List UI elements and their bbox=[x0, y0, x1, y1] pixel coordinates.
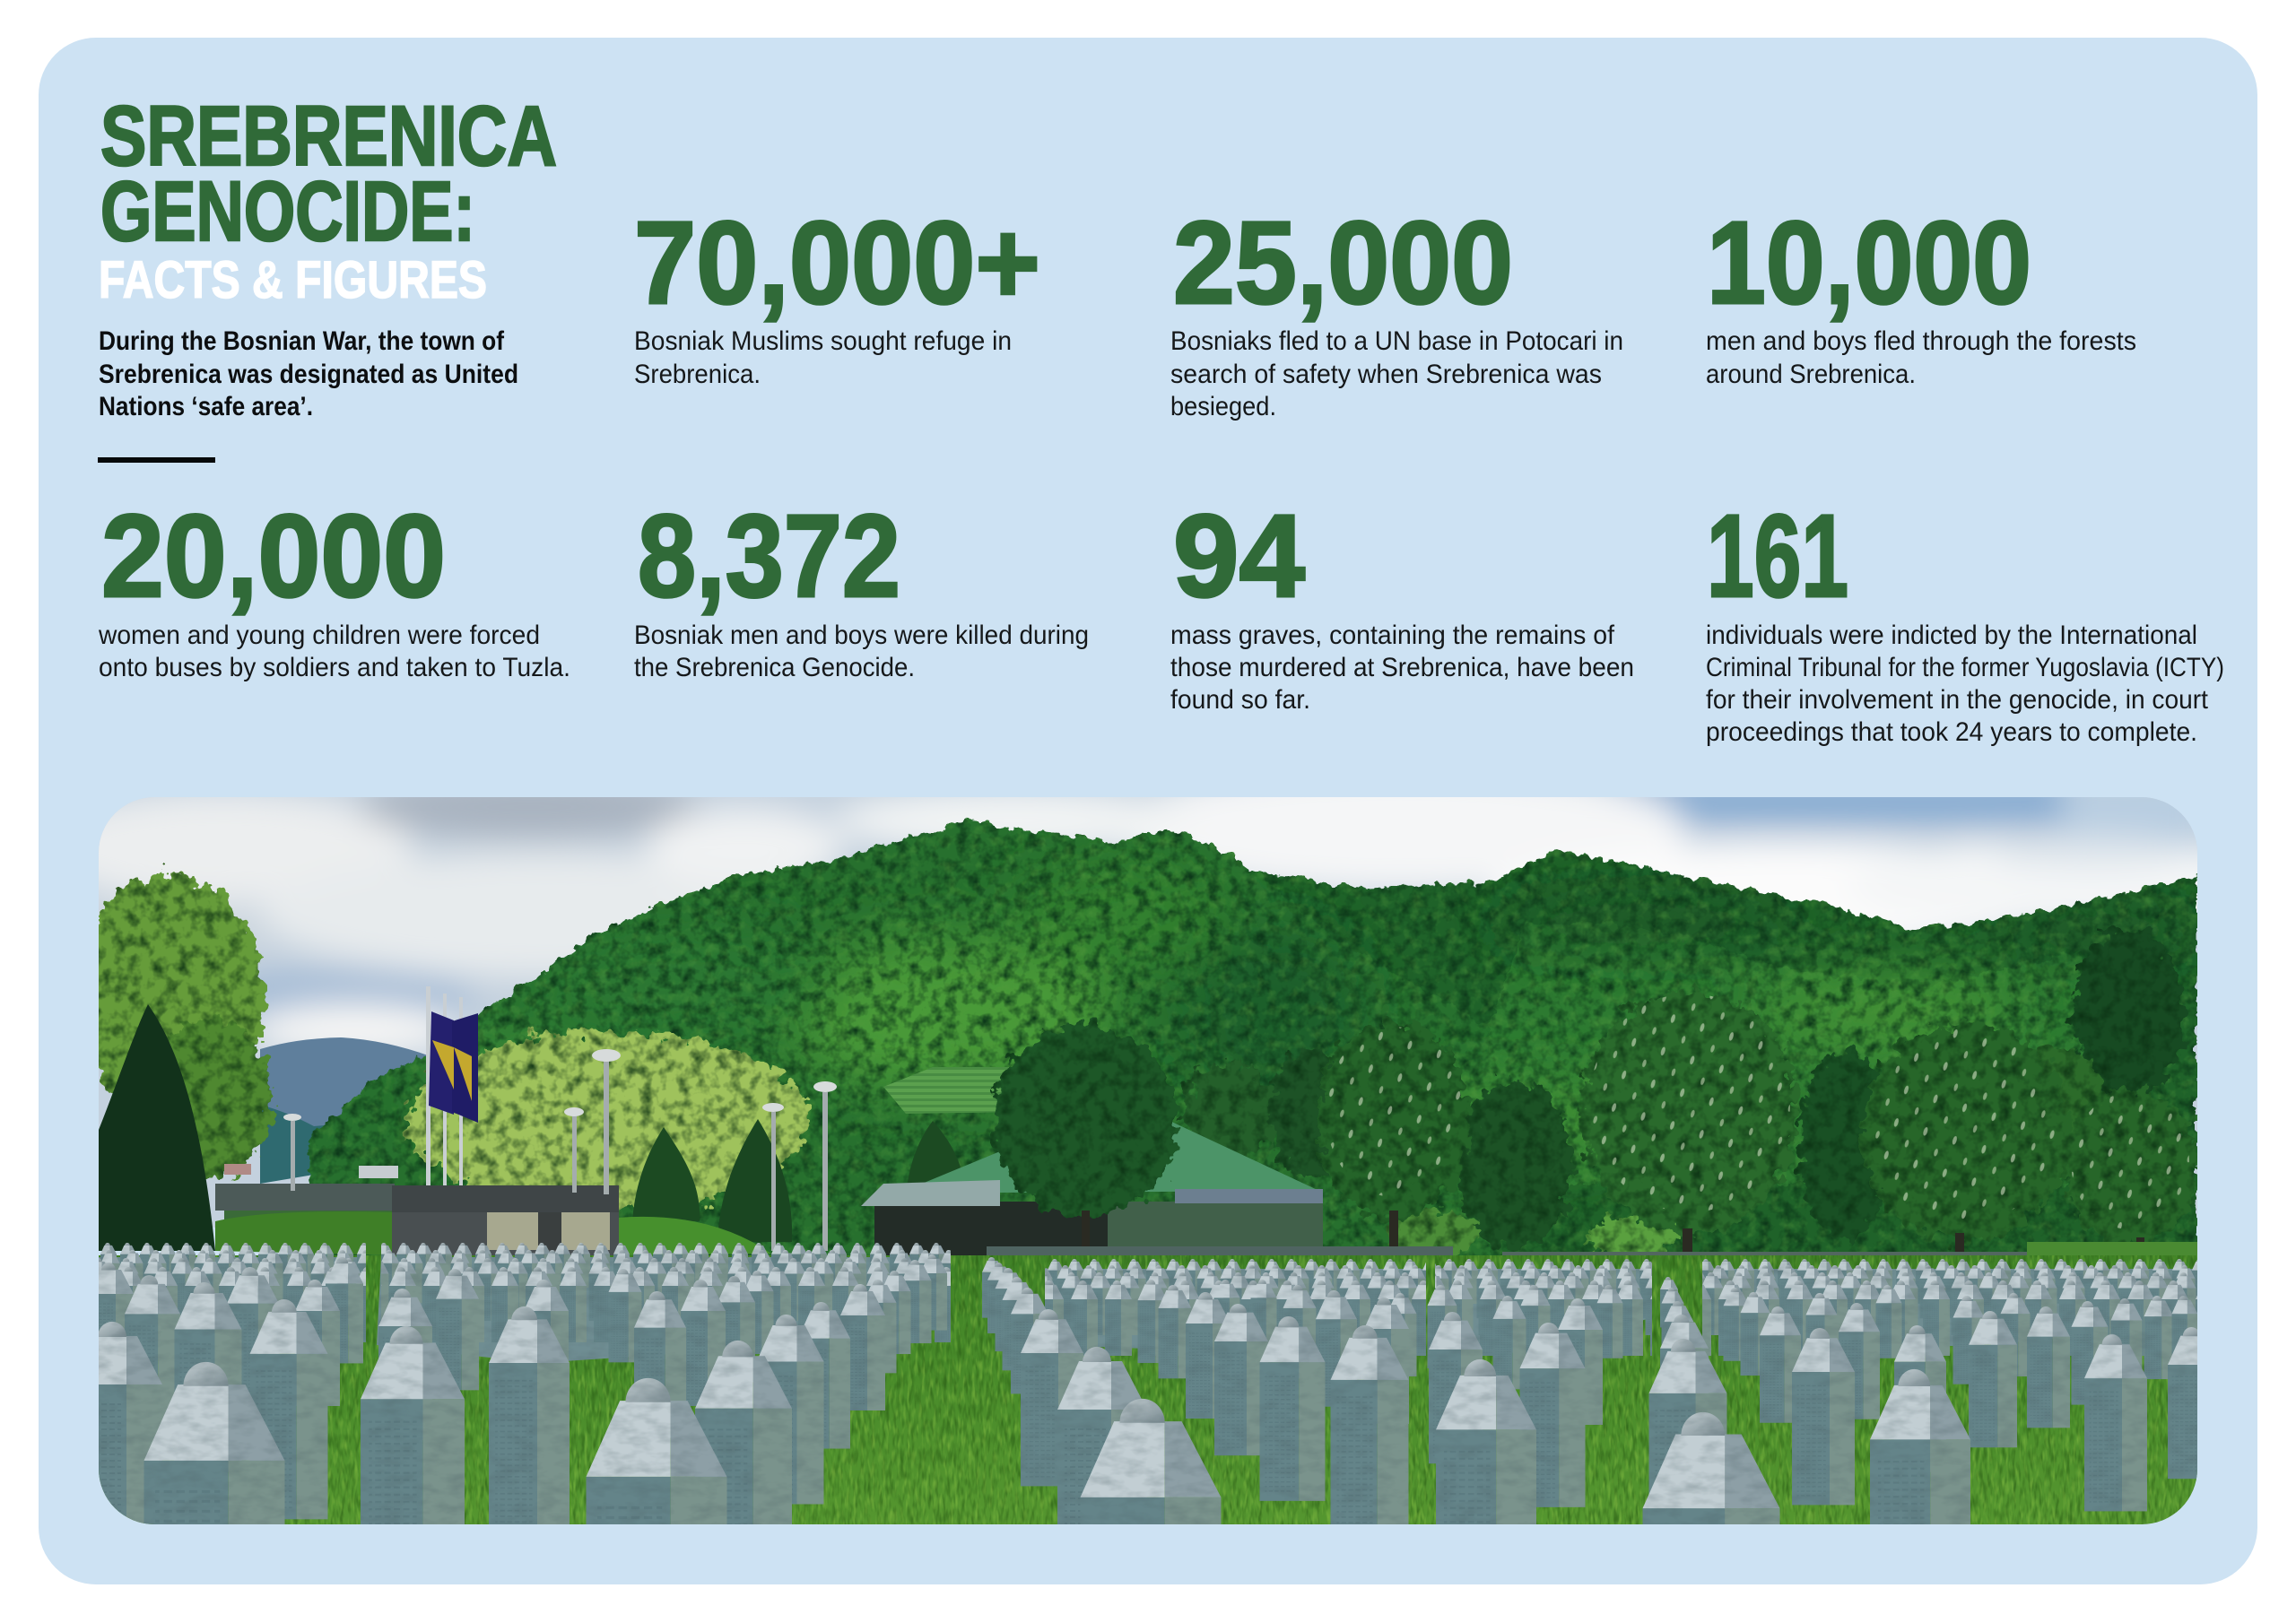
cypress trees bbox=[99, 1004, 963, 1251]
stat: 10,000: men and boys fled through the forests bbox=[1706, 326, 2136, 356]
background far walls bbox=[987, 1242, 2197, 1273]
stat: 25,000: besieged. bbox=[1170, 392, 1276, 421]
intro text: Srebrenica was designated as United bbox=[99, 360, 518, 389]
stat: 94: those murdered at Srebrenica, have been bbox=[1170, 653, 1634, 682]
stat: 25,000: 25,000 bbox=[1173, 196, 1513, 328]
all gravestones bbox=[73, 1243, 2222, 1619]
stat: 20,000: onto buses by soldiers and taken to Tuzla. bbox=[99, 653, 570, 682]
stat: 94: 94 bbox=[1173, 490, 1305, 621]
rule divider bbox=[98, 457, 215, 463]
title bbox=[100, 89, 557, 259]
stat: 94 bbox=[1170, 490, 1634, 715]
background trees bbox=[76, 874, 2184, 1211]
stat: 20,000 bbox=[98, 490, 570, 682]
stat: 94: mass graves, containing the remains of bbox=[1170, 621, 1615, 650]
stat: 161: individuals were indicted by the International bbox=[1706, 621, 2197, 650]
stat: 8,372: Bosniak men and boys were killed during bbox=[634, 621, 1089, 650]
stat: 8,372: 8,372 bbox=[638, 490, 900, 621]
stat: 25,000: search of safety when Srebrenica was bbox=[1170, 360, 1602, 389]
stat: 70,000+: Srebrenica. bbox=[634, 360, 761, 389]
stat: 10,000 bbox=[1706, 196, 2136, 389]
far rows of gravestones bbox=[99, 1243, 2197, 1363]
chestnut trees bbox=[994, 990, 2198, 1249]
intro text bbox=[99, 326, 518, 421]
shrubs behind wall bbox=[1390, 1211, 1677, 1257]
near rows of gravestones bbox=[73, 1254, 2222, 1619]
stat: 8,372: the Srebrenica Genocide. bbox=[634, 653, 915, 682]
stat: 70,000+: Bosniak Muslims sought refuge in bbox=[634, 326, 1012, 356]
vineyard patch bbox=[883, 1067, 1019, 1114]
stat: 10,000: around Srebrenica. bbox=[1706, 360, 1916, 389]
tree blossoms bbox=[1326, 994, 2189, 1229]
stat: 70,000+: 70,000+ bbox=[634, 196, 1040, 328]
distant hills bbox=[260, 1037, 430, 1184]
lamp posts bbox=[283, 1049, 837, 1251]
hillside village bbox=[224, 1164, 398, 1219]
flag poles and flags bbox=[426, 986, 478, 1185]
stat: 25,000: Bosniaks fled to a UN base in Potocari in bbox=[1170, 326, 1623, 356]
stat: 8,372 bbox=[634, 490, 1089, 682]
stat: 161 bbox=[1706, 490, 2224, 747]
lawn mounds bbox=[215, 1184, 771, 1255]
mountains bbox=[305, 807, 2206, 1282]
intro text: Nations ‘safe area’. bbox=[99, 392, 313, 421]
stat: 10,000: 10,000 bbox=[1707, 196, 2031, 328]
stat: 20,000: 20,000 bbox=[101, 490, 446, 621]
subtitle: FACTS & FIGURES bbox=[99, 251, 487, 309]
tree trunks bbox=[1082, 1211, 2144, 1264]
stat: 161: proceedings that took 24 years to complete. bbox=[1706, 717, 2197, 747]
sky bbox=[99, 797, 2197, 1228]
stat: 161: for their involvement in the genocide, in court bbox=[1706, 685, 2209, 715]
stat: 161: Criminal Tribunal for the former Yugoslavia (ICTY) bbox=[1706, 653, 2224, 682]
title: GENOCIDE: bbox=[100, 164, 475, 259]
stat: 161: 161 bbox=[1707, 490, 1848, 621]
stat: 20,000: women and young children were forced bbox=[98, 621, 540, 650]
photo: memorial cemetery bbox=[99, 797, 2197, 1524]
stat: 70,000+ bbox=[634, 196, 1040, 389]
intro text: During the Bosnian War, the town of bbox=[99, 326, 505, 356]
title: SREBRENICA bbox=[100, 89, 557, 184]
stat: 94: found so far. bbox=[1170, 685, 1310, 715]
stat: 25,000 bbox=[1170, 196, 1623, 421]
memorial wall building bbox=[392, 1185, 619, 1255]
pavilion bbox=[861, 1122, 1323, 1255]
grass bbox=[99, 1255, 2197, 1524]
